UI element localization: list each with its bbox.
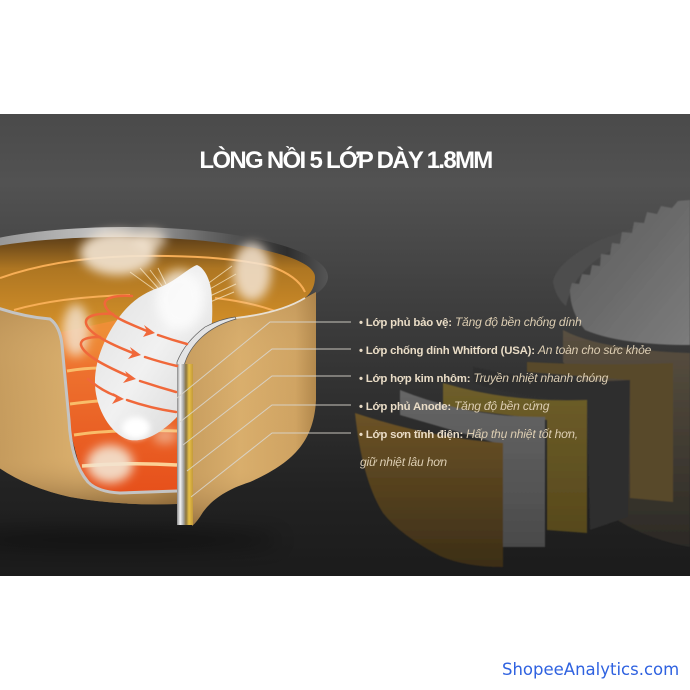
right rim highlight [236,298,305,318]
layer 4: • Lớp phủ Anode:Tăng độ bền cứng [359,399,550,413]
layer 1: • Lớp phủ bảo vệ:Tăng độ bền chống dính [359,315,582,329]
layer descriptions [359,315,652,469]
lower hot interior [58,300,210,500]
wall top silver edge [177,317,236,366]
pot shadow [0,531,280,549]
rice grain [95,265,212,440]
layer 2: • Lớp chống dính Whitford (USA):An toàn cho sức khỏe [359,343,652,357]
layer 3: • Lớp hợp kim nhôm:Truyền nhiệt nhanh chóng [359,371,609,385]
leader lines [177,322,351,497]
watermark: ShopeeAnalytics.com [502,660,679,679]
steam rays [130,266,236,302]
title: LÒNG NỒI 5 LỚP DÀY 1.8MM [199,146,492,174]
outer right wall [178,292,316,526]
left silver cut edge [0,308,177,493]
exploded layers in background [355,200,690,567]
layer 5 continued: giữ nhiệt lâu hơn [360,455,447,469]
layer 5: • Lớp sơn tĩnh điện:Hấp thụ nhiệt tốt hơn, [359,427,578,441]
pot interior [0,237,315,500]
illustration: rice cooker inner pot cutaway [0,227,328,526]
glowing heat rings [0,256,305,311]
outer left wall [0,309,177,504]
pot rim [0,227,328,327]
heat bands [67,368,177,466]
cut face layers [177,364,193,525]
panel: dark background [0,114,690,576]
swirling heat arrows [81,296,187,412]
steam clouds [63,230,271,483]
